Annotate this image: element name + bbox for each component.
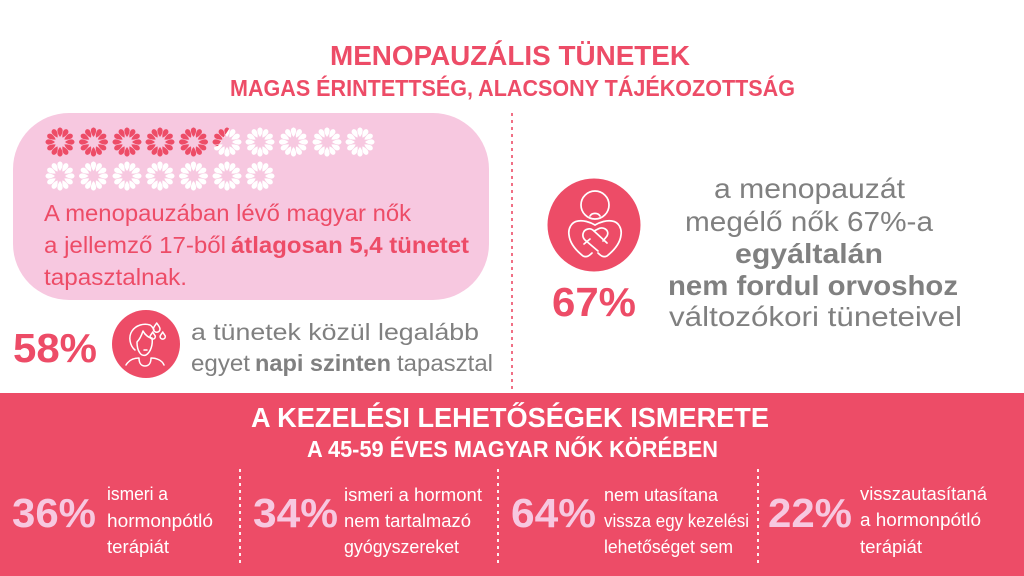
- text: daily symptoms: a tünetek közül legalább: [191, 319, 479, 345]
- stat: 36%: terápiát: [107, 537, 169, 557]
- stat: 67% no doctor: 67%: [552, 279, 636, 325]
- text: no doctor: nem fordul orvoshoz: [668, 270, 958, 301]
- icon: person with crossed arms: [548, 178, 640, 272]
- stat: 22%: a hormonpótló: [860, 510, 981, 530]
- panel text: [44, 200, 469, 290]
- text: no doctor: [668, 173, 962, 332]
- panel text: a jellemző 17-ből: [44, 232, 226, 258]
- title: MENOPAUZÁLIS TÜNETEK: [330, 40, 690, 71]
- stat: 64%: lehetőséget sem: [604, 537, 733, 557]
- stat: 36%: [12, 484, 213, 557]
- text: no doctor: megélő nők 67%-a: [685, 206, 933, 237]
- panel: average symptoms: [13, 113, 489, 300]
- panel text: tapasztalnak.: [44, 264, 187, 290]
- stat: 22%: 22%: [768, 490, 852, 536]
- stat: 64%: [511, 485, 749, 557]
- stat: 34%: [253, 485, 482, 557]
- stat: 34%: ismeri a hormont: [344, 485, 482, 505]
- stat: 36%: ismeri a: [107, 484, 169, 504]
- stat: 58% daily symptoms: 58%: [13, 325, 97, 371]
- heading: [251, 402, 769, 462]
- text: no doctor: a menopauzát: [714, 173, 905, 204]
- panel: treatment awareness: [0, 393, 1024, 576]
- text: daily symptoms: napi szinten: [255, 350, 391, 376]
- stat: 36%: hormonpótló: [107, 511, 213, 531]
- heading: A 45-59 ÉVES MAGYAR NŐK KÖRÉBEN: [307, 435, 718, 462]
- text: no doctor: változókori tüneteivel: [669, 301, 962, 332]
- stat: 67% no doctor: [548, 173, 962, 332]
- stat: 36%: 36%: [12, 490, 96, 536]
- text: no doctor: egyáltalán: [735, 238, 883, 269]
- icon: sweating woman: [112, 310, 180, 378]
- stat: 64%: 64%: [511, 490, 596, 536]
- text: daily symptoms: egyet: [191, 350, 251, 376]
- icon row: 17 flowers, 5.4 highlighted: [46, 128, 374, 190]
- title: MAGAS ÉRINTETTSÉG, ALACSONY TÁJÉKOZOTTSÁG: [230, 74, 795, 101]
- stat: 64%: vissza egy kezelési: [604, 511, 749, 531]
- text: daily symptoms: tapasztal: [397, 350, 493, 376]
- title: [230, 40, 795, 101]
- panel text: A menopauzában lévő magyar nők: [44, 200, 412, 226]
- stat: 34%: 34%: [253, 490, 338, 536]
- heading: A KEZELÉSI LEHETŐSÉGEK ISMERETE: [251, 402, 769, 433]
- stat: 34%: nem tartalmazó: [344, 511, 471, 531]
- panel text: átlagosan 5,4 tünetet: [231, 232, 469, 258]
- stat: 22%: terápiát: [860, 537, 922, 557]
- stat: 58% daily symptoms: [13, 310, 493, 378]
- stat: 34%: gyógyszereket: [344, 537, 459, 557]
- text: daily symptoms: [191, 319, 493, 376]
- stat: 64%: nem utasítana: [604, 485, 719, 505]
- stat: 22%: [768, 484, 988, 557]
- stat: 22%: visszautasítaná: [860, 484, 988, 504]
